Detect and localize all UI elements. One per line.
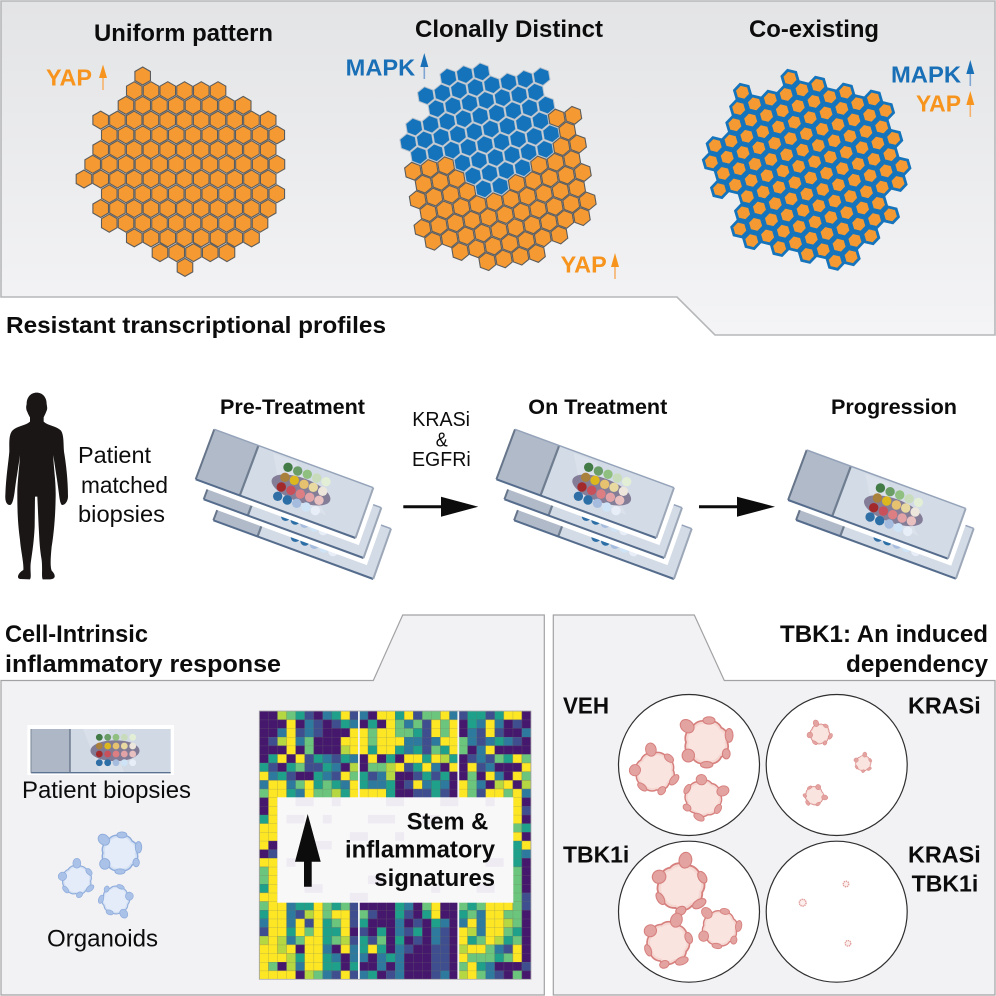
label: YAP up, uniform: YAP <box>46 65 92 91</box>
text: patient matched biopsies: matched <box>81 472 168 498</box>
icon: organoids <box>52 832 142 921</box>
panel: TBK1 induced dependency <box>553 615 995 995</box>
panel: cell-intrinsic inflammatory response <box>1 615 544 995</box>
heading: resistant transcriptional profiles: Resistant transcriptional profiles <box>6 312 386 338</box>
heading: cell-intrinsic inflammatory response: Cell-Intrinsic <box>5 621 148 648</box>
hexagon cluster: uniform pattern <box>76 67 285 276</box>
text: patient biopsies: Patient biopsies <box>22 777 191 804</box>
slide stack: progression <box>788 450 974 579</box>
label: VEH: VEH <box>563 692 609 718</box>
hexagon cluster: co-existing <box>686 45 932 297</box>
text: patient matched biopsies: biopsies <box>78 501 165 527</box>
arrow: pre-treatment to on treatment <box>403 497 478 517</box>
icon: human silhouette <box>5 393 68 579</box>
arrow: on treatment to progression <box>699 497 775 517</box>
text: KRASi and EGFRi: KRASi <box>412 409 470 431</box>
label: MAPK up, clonally distinct: MAPK <box>346 54 415 80</box>
text: KRASi and EGFRi: EGFRi <box>412 449 471 471</box>
text: KRASi and EGFRi: & <box>436 430 448 452</box>
heatmap <box>259 711 531 979</box>
slide stack: pre-treatment <box>196 429 391 579</box>
heading: co-existing: Co-existing <box>749 16 879 43</box>
heading: progression: Progression <box>831 396 957 419</box>
heading: cell-intrinsic inflammatory response: inflammatory response <box>5 651 281 678</box>
text: stem and inflammatory signatures <box>345 808 496 892</box>
text: stem and inflammatory signatures: Stem & <box>407 808 488 835</box>
hexagon cluster: clonally distinct <box>390 48 604 281</box>
text: patient matched biopsies <box>78 442 168 527</box>
well: KRASi plus TBK1i <box>766 841 907 982</box>
heading: cell-intrinsic inflammatory response <box>5 621 281 678</box>
heading: on treatment: On Treatment <box>528 396 667 419</box>
text: stem and inflammatory signatures: inflammatory <box>345 836 496 863</box>
heading: uniform pattern: Uniform pattern <box>94 20 273 47</box>
label: TBK1i: TBK1i <box>563 842 629 868</box>
label: YAP up, clonally distinct: YAP <box>561 252 607 278</box>
heading: TBK1 an induced dependency <box>780 621 988 678</box>
label: MAPK up, co-existing: MAPK <box>891 61 961 87</box>
overlay: stem and inflammatory signatures <box>277 797 513 903</box>
well: VEH <box>618 694 760 836</box>
slide stack: on treatment <box>496 429 692 579</box>
label: KRASi TBK1i <box>908 842 981 897</box>
heading: pre-treatment: Pre-Treatment <box>220 396 365 419</box>
text: patient matched biopsies: Patient <box>78 442 151 468</box>
heading: TBK1 an induced dependency: TBK1: An induced <box>780 621 988 648</box>
well: KRASi <box>766 694 907 836</box>
text: KRASi and EGFRi <box>412 409 471 471</box>
well: TBK1i <box>618 841 760 982</box>
panel: resistant transcriptional profiles <box>1 1 995 335</box>
text: organoids: Organoids <box>47 926 158 953</box>
text: stem and inflammatory signatures: signatures <box>374 865 495 892</box>
label: YAP up, co-existing: YAP <box>916 90 961 116</box>
arrow: up <box>295 814 321 887</box>
label: KRASi TBK1i: TBK1i <box>912 871 978 897</box>
heading: TBK1 an induced dependency: dependency <box>846 651 988 678</box>
label: KRASi: KRASi <box>908 692 981 718</box>
label: KRASi TBK1i: KRASi <box>908 842 981 868</box>
heading: clonally distinct: Clonally Distinct <box>415 16 603 43</box>
icon: patient biopsy slide <box>27 725 174 775</box>
